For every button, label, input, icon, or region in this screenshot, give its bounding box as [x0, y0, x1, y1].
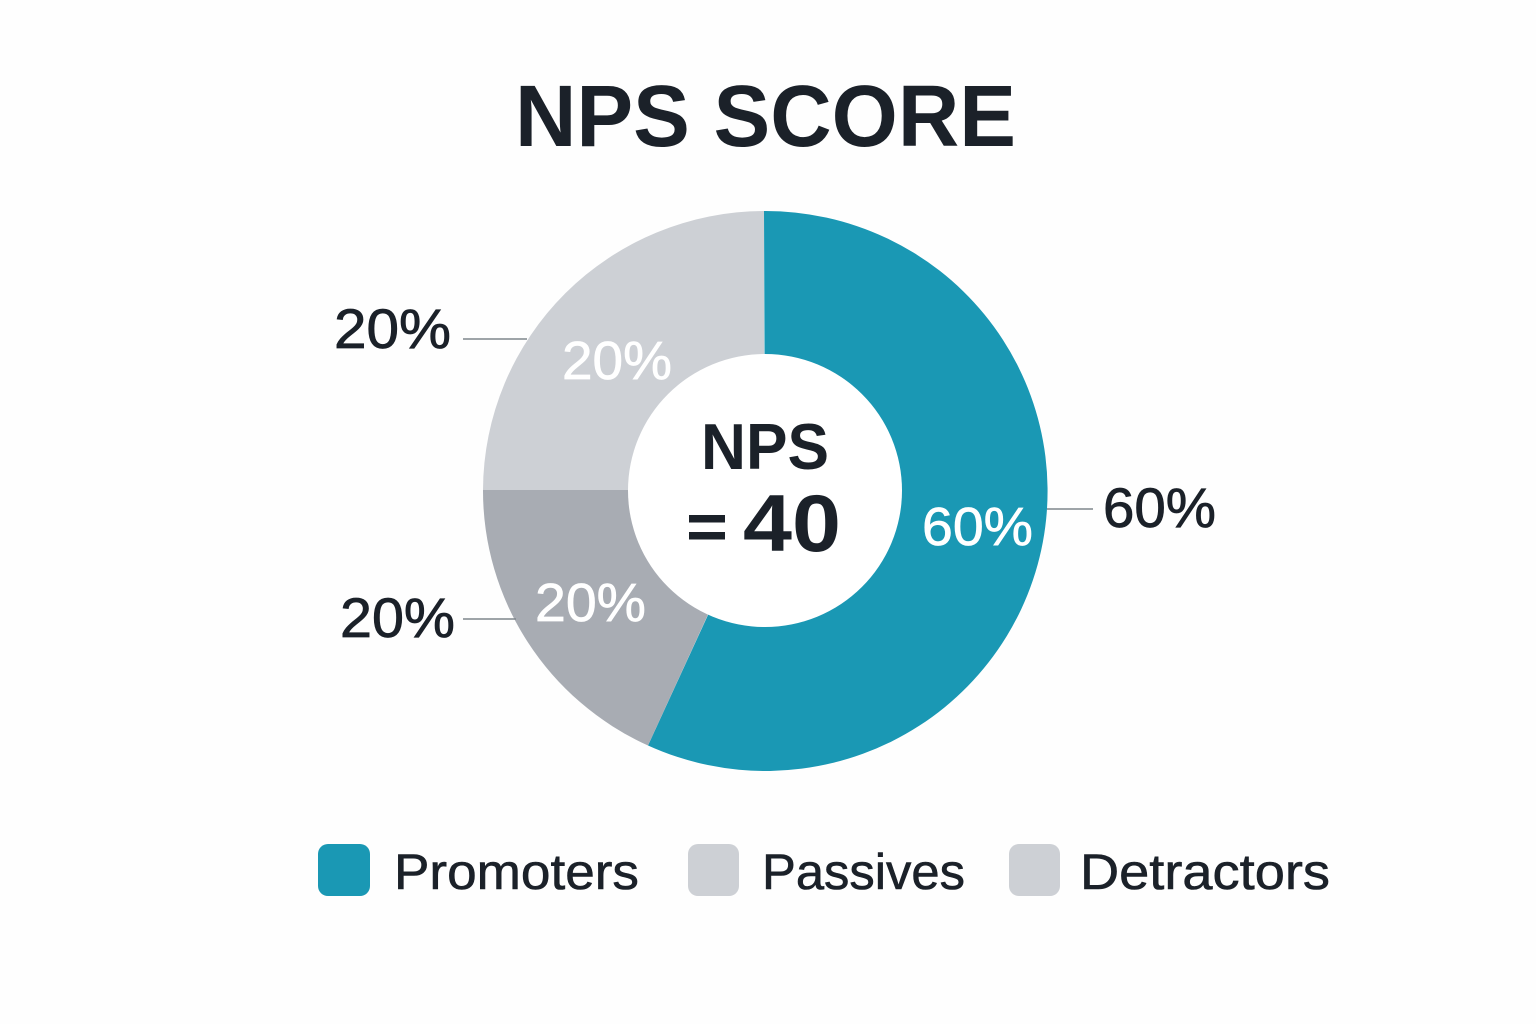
center value: NPS	[701, 410, 829, 483]
segment: passives 20%	[483, 211, 764, 490]
segment: promoters 60%	[648, 211, 1048, 771]
center value	[689, 410, 841, 569]
legend item: detractors: Detractors	[1080, 844, 1330, 900]
legend item: passives: Passives	[762, 844, 965, 900]
legend item: promoters: Promoters	[394, 844, 639, 900]
title: NPS SCORE	[515, 68, 1016, 165]
center value: 40	[743, 479, 841, 569]
donut hole	[628, 354, 902, 627]
inner label: promoters: 60%	[922, 497, 1033, 557]
callout: passives 20%: 20%	[334, 297, 451, 360]
callout: detractors 20%: 20%	[340, 586, 455, 649]
segment: detractors 20%	[483, 490, 765, 746]
legend	[318, 844, 1330, 900]
inner label: detractors: 20%	[535, 573, 646, 633]
callout: promoters 60%: 60%	[1103, 476, 1216, 539]
inner label: passives: 20%	[562, 331, 672, 391]
donut chart	[483, 211, 1048, 771]
